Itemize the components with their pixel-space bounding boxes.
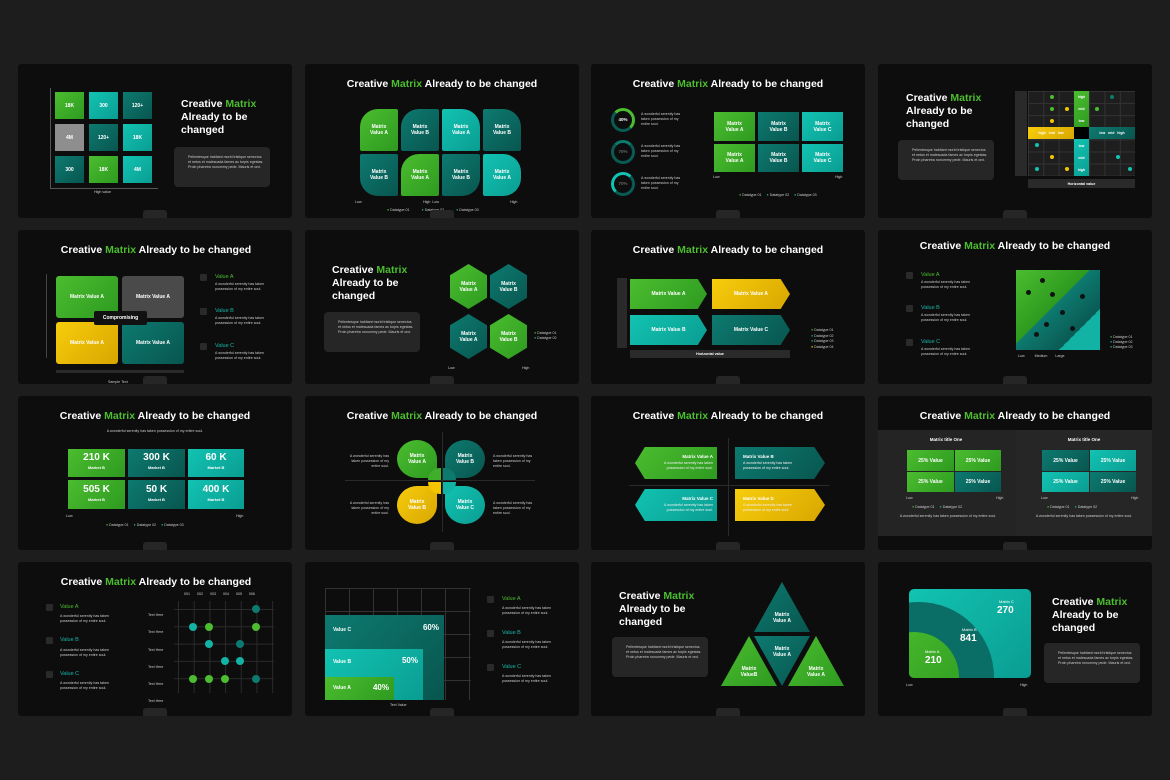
grid: 300 K [143, 452, 170, 463]
left panel: 25% Value [918, 479, 943, 485]
slide 6: hexagons: ● Datatype 02 [534, 336, 557, 340]
leaf cells: ● Datatype 01 ● Datatype 02 ● Datatype 03 [387, 208, 479, 212]
left panel: ● Datatype 01 ● Datatype 02 [912, 505, 962, 509]
leaf cells [355, 109, 521, 212]
hexagons: Value A [460, 336, 477, 342]
grid cells: 18K [133, 134, 142, 140]
petals: Value B [456, 459, 474, 465]
leaf cells: Matrix [454, 124, 468, 130]
chart: Matrix B [962, 627, 977, 632]
grid: Value B [769, 126, 788, 132]
arrows: Matrix Value A [682, 454, 713, 459]
slide 9: value grid: A wonderful serenity has taken possession of my entire soul. [107, 429, 203, 433]
title: Creative Matrix [906, 92, 981, 104]
quadrants: Matrix Value A [70, 294, 104, 300]
left panel: High [996, 496, 1003, 500]
arrows: Matrix Value B [743, 454, 774, 459]
panel body [878, 430, 1152, 536]
arrows: A wonderful serenity has taken possession of my entire soul. [664, 503, 713, 512]
left panel: 25% Value [918, 458, 943, 464]
slide 10: flower: A wonderful serenity has taken possession of my entire soul. [493, 454, 532, 468]
left panel: A wonderful serenity has taken possession of my entire soul. [900, 514, 996, 518]
leaf cells: Value A [493, 175, 511, 181]
text box: Pellentesque habitant morbi tristique senectus et netus et malesuada fames ac turpis egestas. Proin pharetra nonummy pede. Mauris et orci. [912, 148, 987, 162]
right panel: 25% Value [1053, 458, 1078, 464]
grid: Matrix [771, 152, 786, 158]
slide 14: nested bars: Text Value [390, 703, 407, 707]
title: Already to be [181, 111, 248, 123]
triangles: Matrix [775, 612, 789, 618]
hexagons: Value B [499, 336, 518, 342]
triangles: Matrix [742, 666, 756, 672]
grid cells: High value [94, 190, 111, 194]
leaf cells: Matrix [372, 169, 386, 175]
leaf cells: Value B [452, 175, 470, 181]
slide 9: value grid [18, 396, 292, 550]
grid cells: 18K [99, 166, 108, 172]
quadrants: Matrix Value A [136, 294, 170, 300]
slide 11: pointer arrows [591, 396, 865, 550]
grid: 210 K [83, 452, 110, 463]
title: changed [181, 124, 224, 136]
right panel: A wonderful serenity has taken possession of my entire soul. [1036, 514, 1132, 518]
dot chart: 001 002 003 004 005 006 [184, 592, 255, 596]
text box [898, 140, 994, 180]
list: Value C [921, 339, 940, 345]
arrows: A wonderful serenity has taken possession of my entire soul. [743, 461, 792, 470]
hexagons: Low [448, 366, 455, 370]
leaf cells: Value B [493, 130, 511, 136]
slide 16: nested circles [878, 562, 1152, 716]
list: A wonderful serenity has taken possession of my entire soul. [215, 351, 264, 360]
arrows [617, 278, 790, 358]
title: Creative Matrix Already to be changed [60, 410, 250, 422]
chart: Matrix C [999, 599, 1014, 604]
quadrants: Matrix Value A [136, 340, 170, 346]
slide 10: flower: A wonderful serenity has taken possession of my entire soul. [493, 501, 532, 515]
title: Already to be [332, 277, 399, 289]
dot chart [148, 592, 274, 703]
left panel [900, 437, 1004, 518]
slide 4: cross matrix [878, 64, 1152, 218]
leaf cells: Value B [370, 175, 388, 181]
grid cells: 4M [66, 134, 73, 140]
grid: Matrix [727, 120, 742, 126]
matrix: low mid high [1099, 131, 1125, 135]
text box [174, 147, 270, 187]
triangles: Value A [807, 672, 825, 678]
arrows: Matrix Value C [682, 496, 713, 501]
title: Creative Matrix Already to be changed [920, 410, 1110, 422]
hexagons: Matrix [501, 330, 516, 336]
grid: High [236, 514, 243, 518]
slide 13: dot chart: Text Here [148, 699, 163, 703]
petals: Value C [456, 505, 474, 511]
title: Creative Matrix [181, 98, 256, 110]
grid: Matrix [771, 120, 786, 126]
hexagons: Matrix [461, 330, 476, 336]
dot chart: Text Here [148, 665, 163, 669]
grid: Value A [726, 158, 743, 164]
slide 5: quadrant with compromising [18, 230, 292, 384]
donuts: 70% [618, 181, 628, 186]
list: A wonderful serenity has taken possession of my entire soul. [921, 280, 970, 289]
arrows [635, 447, 825, 521]
title: Creative Matrix Already to be changed [61, 576, 251, 588]
hexagons: Value B [499, 286, 518, 292]
leaf cells: Matrix [413, 124, 427, 130]
slide 7: arrow matrix: ● Datatype 02 [811, 334, 834, 338]
text box: Pellentesque habitant morbi tristique senectus et netus et malesuada fames ac turpis egestas. Proin pharetra nonummy pede. Mauris et orci. [1058, 651, 1133, 665]
grid: Value B [769, 158, 788, 164]
right panel: High [1131, 496, 1138, 500]
slide 13: dot chart [18, 562, 292, 716]
slide 10: flower: A wonderful serenity has taken possession of my entire soul. [350, 501, 389, 515]
grid [713, 112, 843, 197]
grid: Market B [208, 496, 224, 502]
leaf cells: Value A [370, 130, 388, 136]
chart: 40% [373, 683, 389, 692]
arrows: Horizontal value [696, 352, 724, 356]
leaf cells: Matrix [372, 124, 386, 130]
triangles [721, 582, 844, 686]
grid: Value C [813, 158, 832, 164]
title [1052, 596, 1128, 634]
dot chart: Text Here [148, 613, 163, 617]
grid cells: 300 [99, 102, 108, 108]
title: Creative Matrix [1052, 596, 1127, 608]
grid: Low [713, 175, 720, 179]
grid: ● Datatype 01 ● Datatype 02 ● Datatype 03 [106, 523, 184, 527]
triangles: Value A [773, 652, 791, 658]
petals: Matrix [410, 453, 424, 459]
matrix [1015, 91, 1135, 188]
slide 14: nested bars [305, 562, 579, 716]
triangles: Value A [773, 618, 791, 624]
title: Creative Matrix Already to be changed [633, 410, 823, 422]
hexagons: Matrix [461, 280, 476, 286]
slide 7: arrow matrix: ● Datatype 01 [811, 328, 834, 332]
matrix: high [1078, 95, 1085, 99]
list: Value B [215, 308, 234, 314]
title: changed [1052, 622, 1095, 634]
chart: Value C [333, 627, 351, 633]
list: Value A [215, 274, 234, 280]
chart: 210 [925, 655, 942, 666]
hexagons [448, 264, 530, 370]
leaf cells: High [510, 200, 517, 204]
donuts: A wonderful serenity has taken possession of my entire soul. [641, 112, 680, 126]
grid: Value A [726, 126, 743, 132]
list: Value B [921, 305, 940, 311]
list: A wonderful serenity has taken possession of my entire soul. [60, 681, 109, 690]
slide 6: hexagons: ● Datatype 01 [534, 331, 557, 335]
slide 3: donuts and grid [591, 64, 865, 218]
quadrants: Matrix Value A [70, 340, 104, 346]
leaf cells: Matrix [495, 124, 509, 130]
list: A wonderful serenity has taken possession of my entire soul. [60, 648, 109, 657]
hexagons: Matrix [501, 280, 516, 286]
list: Value A [502, 596, 521, 602]
matrix: mid [1078, 156, 1085, 160]
title: Creative Matrix [619, 590, 694, 602]
list: Value B [502, 630, 521, 636]
slide 15: triangles [591, 562, 865, 716]
quadrants [46, 274, 184, 384]
matrix: Horizontal value [1068, 182, 1095, 186]
petals: Matrix [410, 499, 424, 505]
text box: Pellentesque habitant morbi tristique senectus et netus et malesuada fames ac turpis egestas. Proin pharetra nonummy pede. Mauris et orci. [188, 155, 263, 169]
arrows: Matrix Value A [734, 291, 768, 297]
title: changed [619, 616, 662, 628]
chart [1016, 270, 1100, 358]
hexagons: Value A [460, 286, 477, 292]
chart: Value A [333, 685, 351, 691]
right panel: ● Datatype 01 ● Datatype 02 [1047, 505, 1097, 509]
grid: Market B [88, 465, 105, 470]
leaf cells: Matrix [495, 169, 509, 175]
right panel: 25% Value [1053, 479, 1078, 485]
slide 1: number grid [18, 64, 292, 218]
slide 10: flower [305, 396, 579, 550]
grid: Market B [148, 465, 165, 470]
list: Value C [60, 671, 79, 677]
slide 8: scatter: ● Datatype 03 [1110, 345, 1133, 349]
left panel: Low [906, 496, 913, 500]
title: Already to be [1052, 609, 1119, 621]
matrix: high mid low [1038, 131, 1064, 135]
grid: 400 K [203, 484, 229, 494]
chart: Value B [333, 659, 351, 665]
grid [66, 449, 244, 527]
slide 12: two matrix panels [878, 396, 1152, 550]
petals: Value A [408, 459, 426, 465]
list: Value C [502, 664, 521, 670]
matrix: high [1078, 168, 1085, 172]
quadrants: Compromising [103, 315, 138, 321]
arrows: Matrix Value C [734, 327, 768, 333]
list: A wonderful serenity has taken possession of my entire soul. [502, 640, 551, 649]
right panel: Low [1041, 496, 1048, 500]
list [46, 604, 109, 690]
grid cells: 120+ [98, 134, 109, 140]
right panel [1016, 430, 1152, 536]
arrows: Matrix Value A [652, 291, 686, 297]
grid cells [50, 88, 158, 194]
title: Creative Matrix Already to be changed [347, 78, 537, 90]
list [200, 274, 264, 360]
grid: Matrix [815, 152, 830, 158]
grid: ● Datatype 01 ● Datatype 02 ● Datatype 03 [739, 193, 817, 197]
title [619, 590, 694, 628]
grid: High [835, 175, 842, 179]
title: Creative Matrix Already to be changed [633, 244, 823, 256]
side texts: A wonderful serenity has taken possession of my entire soul. [350, 454, 389, 468]
matrix: low [1079, 144, 1084, 148]
title: Already to be [619, 603, 686, 615]
chart: Low Medium Large [1018, 354, 1065, 358]
leaf cells: Matrix [413, 169, 427, 175]
list: A wonderful serenity has taken possession of my entire soul. [60, 614, 109, 623]
text box [324, 312, 420, 352]
grid: 505 K [83, 484, 110, 494]
title: Creative Matrix [332, 264, 407, 276]
right panel: 25% Value [1101, 458, 1125, 464]
arrows: Matrix Value B [651, 327, 686, 333]
grid: Market B [208, 465, 224, 470]
grid cells: 120+ [132, 102, 143, 108]
donuts: 70% [618, 149, 628, 154]
chart: 50% [402, 656, 418, 665]
leaf cells: Value A [452, 130, 470, 136]
arrows: A wonderful serenity has taken possession of my entire soul. [743, 503, 792, 512]
quadrants: Sample Text [108, 380, 128, 384]
hexagons: High [522, 366, 529, 370]
chart: 841 [960, 633, 977, 644]
title [332, 264, 408, 302]
left panel: Matrix title One [930, 437, 962, 442]
grid: 50 K [146, 484, 167, 494]
text box [1044, 643, 1140, 683]
leaf cells: Low [355, 200, 362, 204]
text box: Pellentesque habitant morbi tristique senectus et netus et malesuada fames ac turpis egestas. Proin pharetra nonummy pede. Mauris et orci. [626, 645, 701, 659]
title: changed [906, 118, 949, 130]
grid: Market B [148, 496, 165, 502]
title [906, 92, 982, 130]
arrows: Matrix Value D [743, 496, 774, 501]
title: Creative Matrix Already to be changed [633, 78, 823, 90]
list: A wonderful serenity has taken possession of my entire soul. [215, 316, 264, 325]
petals: Value B [408, 505, 426, 511]
right panel: Matrix title One [1068, 437, 1100, 442]
chart: High [1020, 683, 1027, 687]
grid: Matrix [727, 152, 742, 158]
slide 8: scatter: ● Datatype 01 [1110, 335, 1133, 339]
donuts: 40% [618, 117, 628, 122]
leaf cells: Value A [411, 175, 429, 181]
petals: Matrix [458, 499, 472, 505]
slide 7: arrow matrix: ● Datatype 04 [811, 344, 834, 348]
title: changed [332, 290, 375, 302]
left panel: 25% Value [966, 479, 990, 485]
slide 7: arrow matrix: ● Datatype 03 [811, 339, 834, 343]
list: Value A [60, 604, 79, 610]
chart [906, 589, 1031, 687]
chart: 60% [423, 623, 439, 632]
list [906, 272, 970, 356]
leaf cells: Value B [411, 130, 429, 136]
text box: Pellentesque habitant morbi tristique senectus et netus et malesuada fames ac turpis egestas. Proin pharetra nonummy pede. Mauris et orci. [338, 320, 413, 334]
grid: Value C [813, 126, 832, 132]
list: A wonderful serenity has taken possession of my entire soul. [502, 606, 551, 615]
list: Value A [921, 272, 940, 278]
slide 6: hexagons [305, 230, 579, 384]
list: A wonderful serenity has taken possession of my entire soul. [502, 674, 551, 683]
triangles: Matrix [809, 666, 823, 672]
arrows: A wonderful serenity has taken possession of my entire soul. [664, 461, 713, 470]
right panel: 25% Value [1101, 479, 1125, 485]
triangles: Matrix [775, 646, 789, 652]
slide 7: arrow matrix [591, 230, 865, 384]
matrix: mid [1078, 107, 1085, 111]
chart [325, 588, 471, 700]
dot chart: Text Here [148, 648, 163, 652]
title: Creative Matrix Already to be changed [920, 240, 1110, 252]
dot chart: Text Here [148, 682, 163, 686]
matrix: low [1079, 119, 1084, 123]
chart: 270 [997, 605, 1014, 616]
petals [397, 440, 485, 524]
slide 2: leaf matrix [305, 64, 579, 218]
grid cells: 18K [65, 102, 74, 108]
list: A wonderful serenity has taken possession of my entire soul. [215, 282, 264, 291]
leaf cells: High Low [423, 200, 439, 204]
list: Value C [215, 343, 234, 349]
slide 8: scatter: ● Datatype 02 [1110, 340, 1133, 344]
grid cells: 4M [134, 166, 141, 172]
list: Value B [60, 637, 79, 643]
list: A wonderful serenity has taken possession of my entire soul. [921, 313, 970, 322]
grid: Matrix [815, 120, 830, 126]
chart: Low [906, 683, 913, 687]
petals: Matrix [458, 453, 472, 459]
title: Creative Matrix Already to be changed [347, 410, 537, 422]
grid cells: 300 [65, 166, 74, 172]
chart: Matrix A [925, 649, 939, 654]
donuts: A wonderful serenity has taken possession of my entire soul. [641, 144, 680, 158]
grid: 60 K [205, 452, 227, 463]
grid: Market B [88, 496, 105, 502]
title [181, 98, 256, 136]
leaf cells: Matrix [454, 169, 468, 175]
title: Creative Matrix Already to be changed [61, 244, 251, 256]
left panel: 25% Value [966, 458, 990, 464]
text box [612, 637, 708, 677]
donuts: A wonderful serenity has taken possession of my entire soul. [641, 176, 680, 190]
list: A wonderful serenity has taken possession of my entire soul. [921, 347, 970, 356]
slide 8: scatter [878, 230, 1152, 384]
list [487, 596, 551, 683]
triangles: ValueB [741, 672, 757, 678]
grid: Low [66, 514, 73, 518]
donuts [611, 108, 680, 196]
title: Already to be [906, 105, 973, 117]
dot chart: Text Here [148, 630, 163, 634]
